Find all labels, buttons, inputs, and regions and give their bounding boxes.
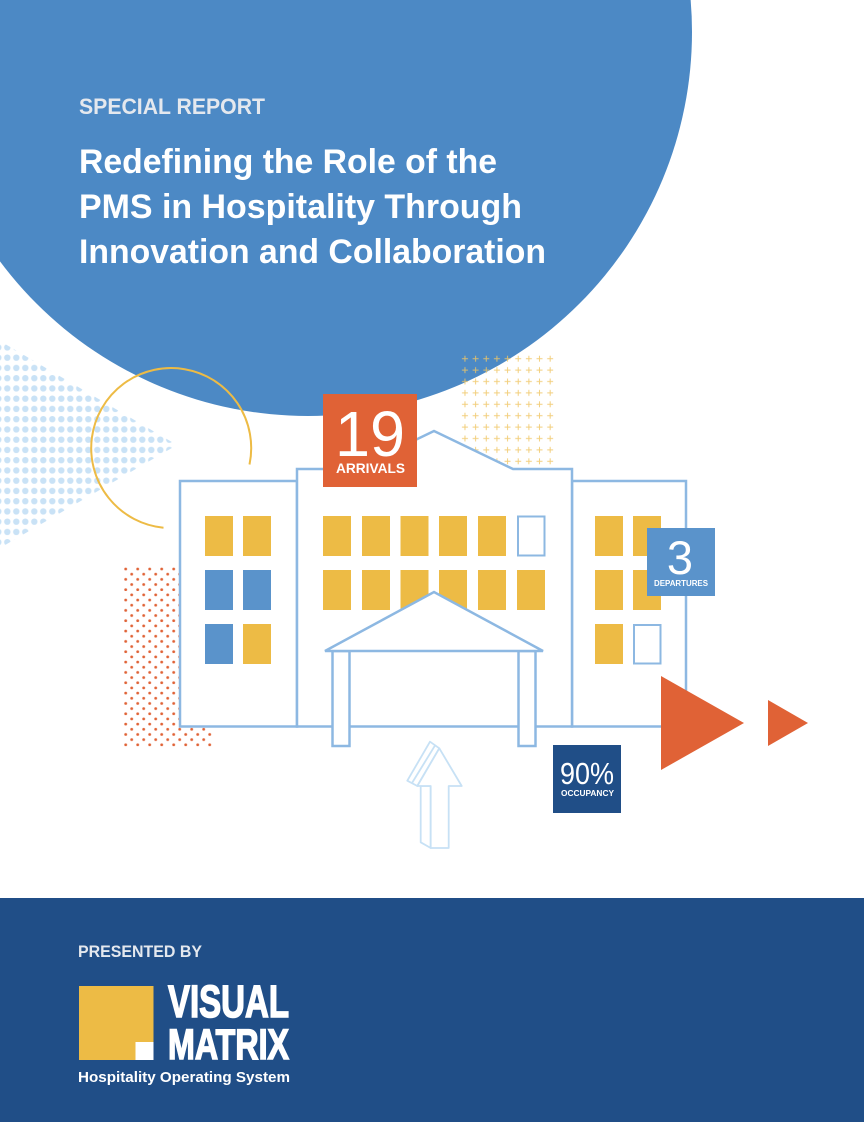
- entrance porch: [325, 592, 543, 746]
- arrivals badge: ARRIVALS: [336, 461, 405, 476]
- right wing: [572, 481, 686, 726]
- occupancy badge: [553, 745, 621, 813]
- arrivals badge: 19: [335, 398, 405, 470]
- dotted triangle pattern: [0, 341, 177, 548]
- center block with roof: [297, 431, 572, 726]
- logo wordmark: [168, 976, 289, 1069]
- left wing: [180, 481, 297, 726]
- logo tagline: Hospitality Operating System: [78, 1069, 290, 1086]
- large orange triangle: [661, 676, 744, 770]
- logo wordmark: VISUAL: [168, 976, 289, 1027]
- icon: outlined up arrow: [407, 742, 462, 848]
- footer band: [0, 898, 864, 1122]
- departures badge: [647, 528, 715, 596]
- right wing windows: [595, 516, 661, 664]
- arrivals badge: [323, 394, 417, 487]
- center windows: [323, 516, 545, 610]
- red dot pattern: [123, 566, 213, 747]
- occupancy badge: OCCUPANCY: [561, 789, 615, 798]
- departures badge: 3: [667, 531, 693, 584]
- title: Redefining the Role of the: [79, 143, 497, 181]
- background circle: [0, 0, 692, 416]
- title: Innovation and Collaboration: [79, 233, 546, 271]
- small orange triangle: [768, 700, 808, 746]
- logo wordmark: MATRIX: [168, 1021, 289, 1069]
- hotel building: [180, 431, 686, 746]
- plus sign pattern: [460, 353, 556, 467]
- logo mark: [79, 986, 154, 1060]
- title: PMS in Hospitality Through: [79, 188, 522, 226]
- yellow arc: [91, 368, 251, 528]
- left wing windows: [205, 516, 271, 664]
- special report label: SPECIAL REPORT: [79, 94, 266, 119]
- occupancy badge: 90%: [560, 756, 614, 791]
- title: [79, 143, 546, 271]
- visual matrix logo: [78, 976, 290, 1086]
- presented by label: PRESENTED BY: [78, 943, 202, 961]
- departures badge: DEPARTURES: [654, 579, 709, 588]
